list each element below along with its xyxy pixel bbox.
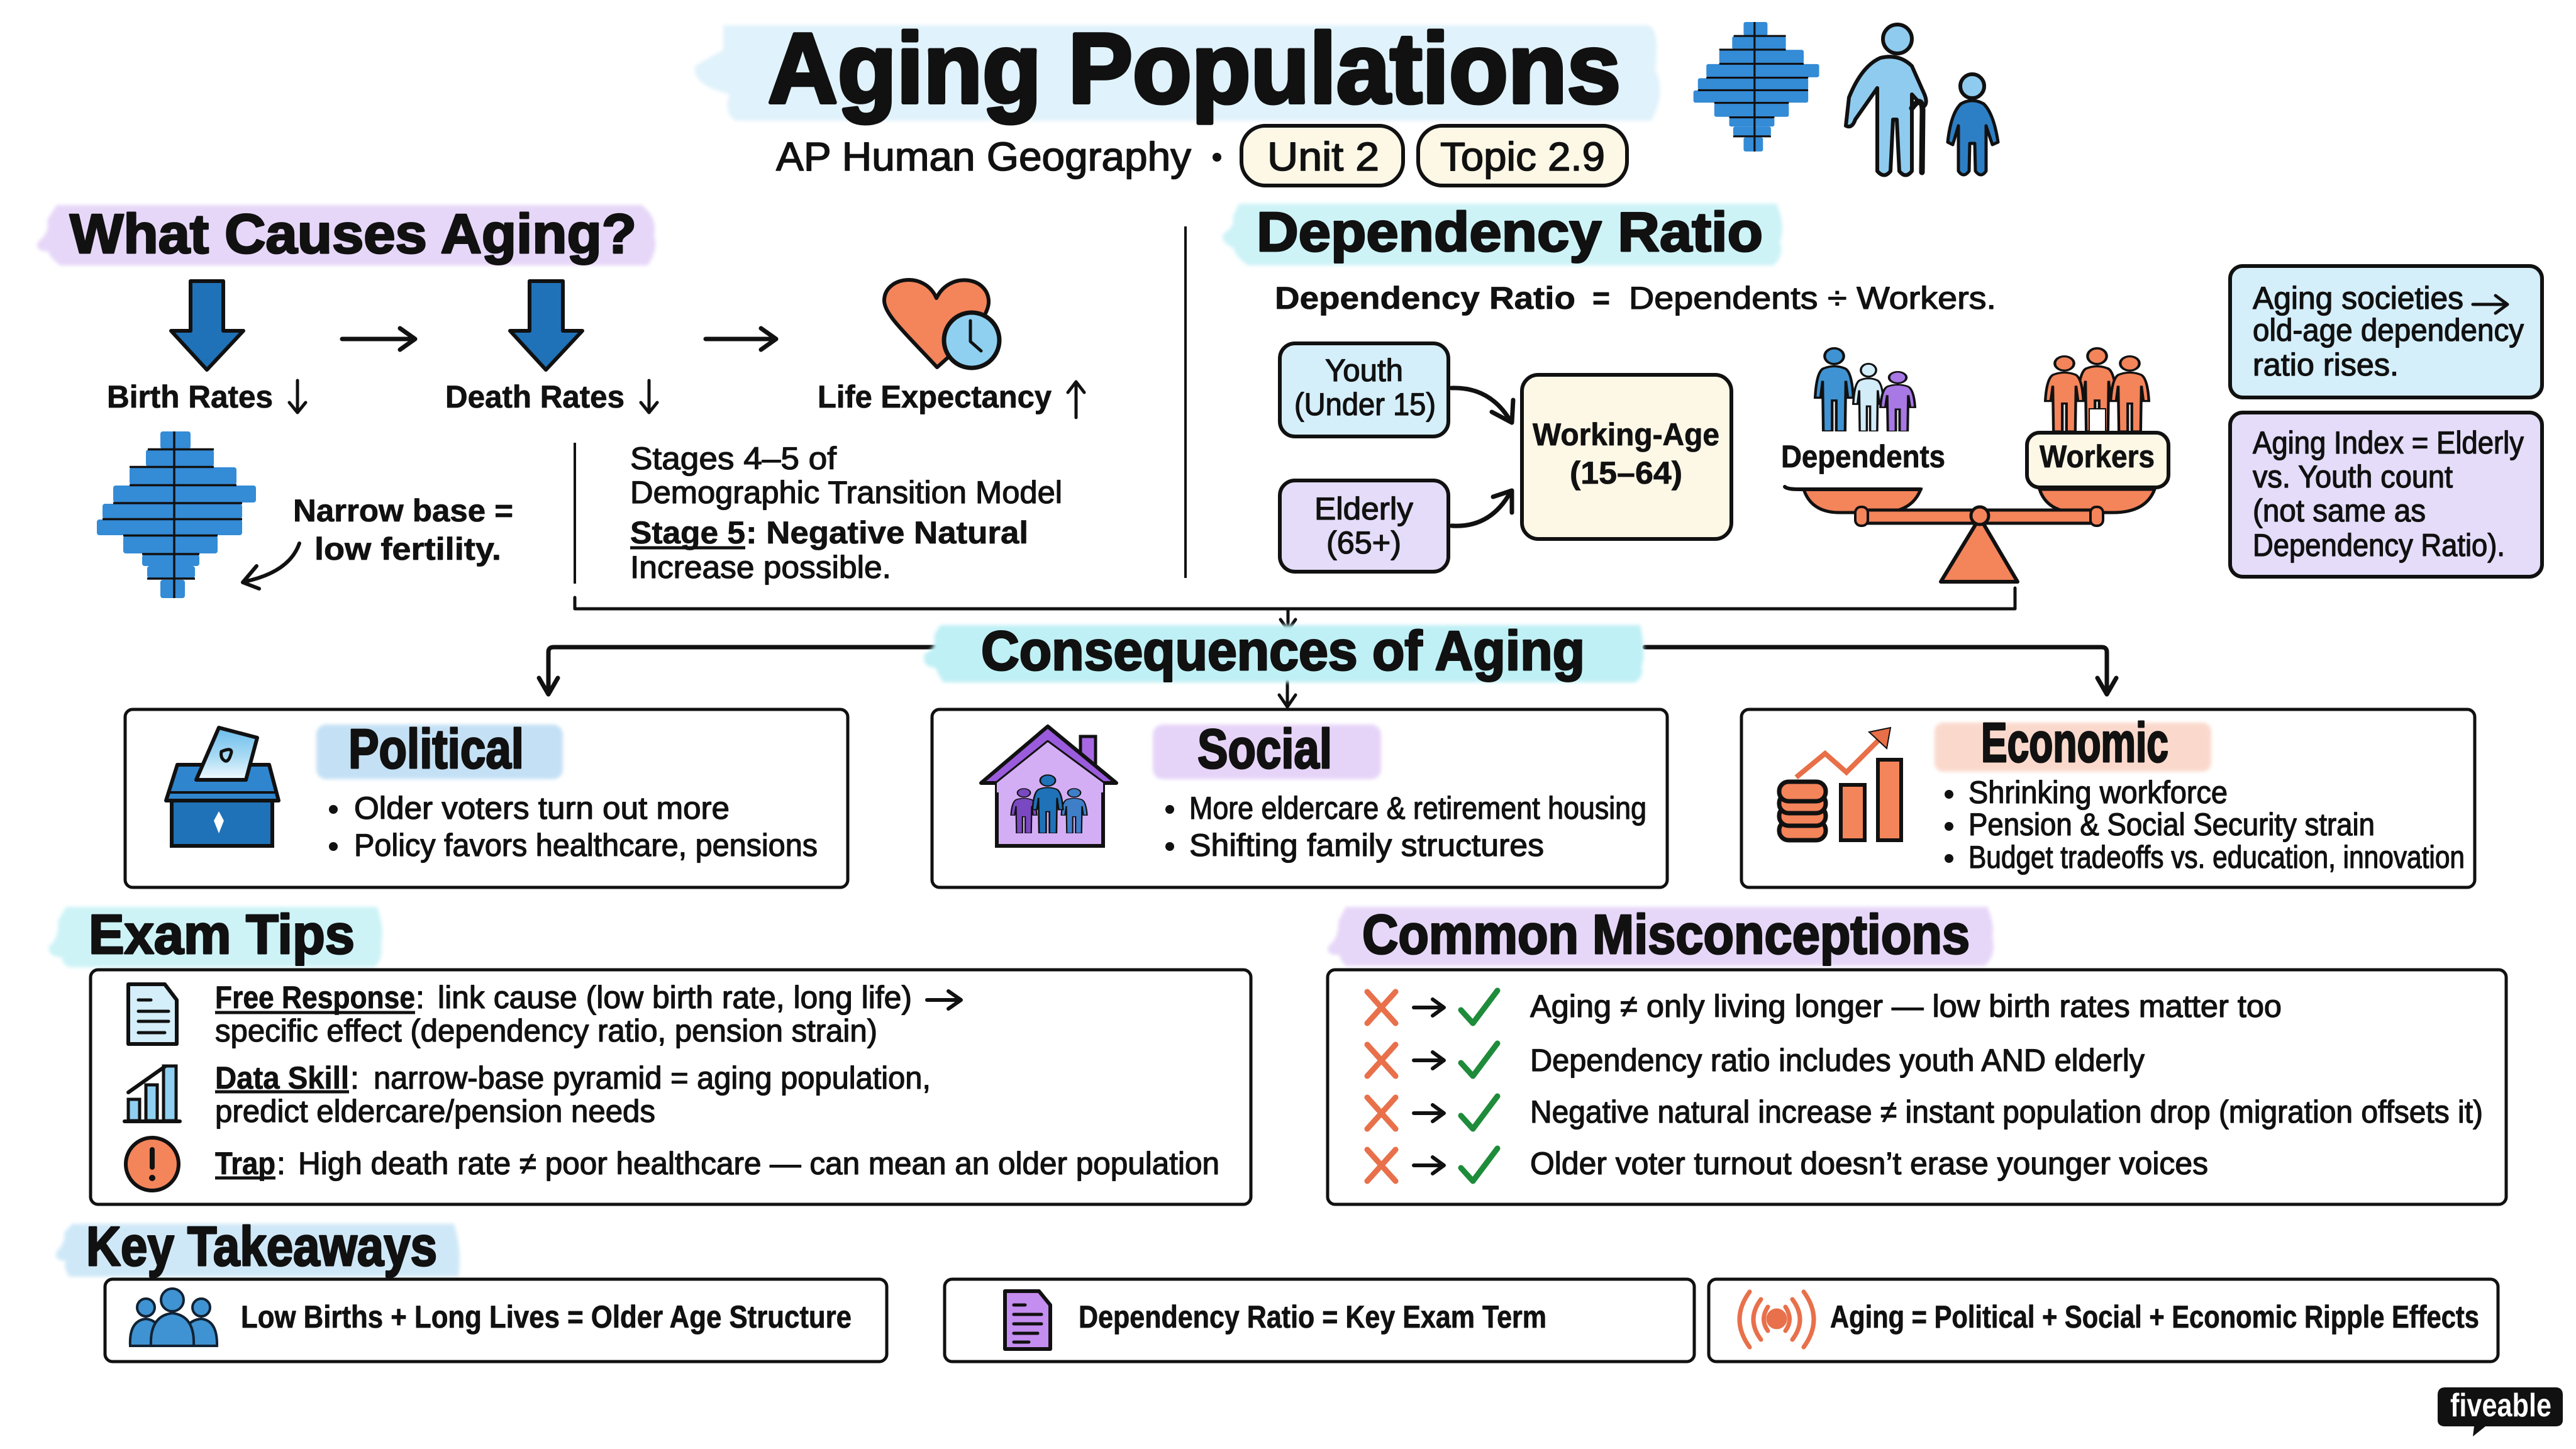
icon: ripple signal [1740, 1292, 1814, 1347]
callout: aging societies: old-age dependency [2253, 313, 2524, 348]
icon: narrow-base pyramid [97, 431, 256, 598]
panel: political [125, 709, 848, 887]
text: data skill: : [350, 1060, 359, 1096]
icon: workers figures [2045, 348, 2149, 431]
row 1: Aging ≠ only living longer — low birth rates matter too [1530, 989, 2282, 1024]
text: demographic transition model: Increase possible. [630, 550, 891, 585]
formula: Dependency Ratio [1275, 280, 1575, 316]
icon: document [128, 984, 177, 1044]
icon: heart with clock [884, 280, 999, 368]
heading highlight [49, 907, 382, 967]
heading highlight [1223, 204, 1782, 265]
box [1328, 970, 2506, 1204]
text: demographic transition model: Stages 4–5 of [630, 441, 836, 476]
arrow: consequences to economic [1645, 647, 2116, 694]
text: demographic transition model [630, 441, 1062, 585]
arrow: consequences to political [539, 647, 936, 694]
logo: fiveable: fiveable [2450, 1387, 2551, 1424]
row 4: Older voter turnout doesn’t erase younger voices [1530, 1146, 2208, 1181]
icon: coins and rising chart [1779, 728, 1901, 840]
label: birth rates: Birth Rates [107, 379, 273, 414]
label: death rates: Death Rates [445, 379, 625, 414]
box: youth: (Under 15) [1294, 387, 1436, 422]
card 2: Dependency Ratio = Key Exam Term [1079, 1299, 1546, 1335]
row 2: Dependency ratio includes youth AND elderly [1530, 1043, 2145, 1078]
bracket connector [575, 588, 2015, 630]
bullets [1945, 775, 2465, 875]
separator dot [1213, 153, 1221, 162]
bullets: Policy favors healthcare, pensions [354, 828, 818, 863]
box: elderly [1280, 480, 1448, 572]
text: demographic transition model: Demographic Transition Model [630, 475, 1062, 510]
callout: aging index: vs. Youth count [2253, 459, 2453, 494]
callout: aging index: (not same as [2253, 493, 2426, 528]
callout: aging index [2230, 413, 2542, 577]
bullets: Budget tradeoffs vs. education, innovation [1968, 840, 2465, 875]
arrow: curved to pyramid base [243, 543, 299, 589]
box: elderly: Elderly [1314, 491, 1413, 526]
panel: common misconceptions [1328, 903, 2506, 1204]
heading highlight [56, 1224, 460, 1277]
icon: ballot box [166, 728, 279, 846]
bullets: Pension & Social Security strain [1968, 807, 2375, 842]
icon: warning [126, 1138, 179, 1191]
heading: Dependency Ratio [1257, 201, 1763, 263]
icon: dependents figures [1815, 348, 1915, 431]
icon: birth arrow [171, 281, 243, 370]
label: life expectancy: Life Expectancy [818, 379, 1052, 414]
panel: social [932, 709, 1667, 887]
bullets: More eldercare & retirement housing [1189, 791, 1646, 826]
heading highlight [37, 205, 655, 265]
text: trap: : [277, 1146, 286, 1181]
icon: balance scale [1785, 487, 2155, 582]
icon: death arrow [510, 281, 582, 370]
heading highlight [316, 724, 563, 779]
icon: elderly person with cane [1846, 25, 1926, 175]
callout: aging societies: ratio rises. [2253, 347, 2399, 382]
card 1 [105, 1279, 887, 1362]
callout: aging index: Dependency Ratio). [2253, 528, 2505, 563]
callout: aging societies [2230, 266, 2542, 397]
box: working-age: Working-Age [1533, 417, 1719, 452]
panel: exam tips [49, 903, 1251, 1204]
bullets: Shifting family structures [1189, 828, 1544, 863]
heading: Key Takeaways [86, 1215, 437, 1277]
text: free response: specific effect (dependency ratio, pension strain) [215, 1013, 877, 1048]
note: narrow base [293, 493, 513, 567]
pill: unit: Unit 2 [1267, 134, 1379, 179]
icon: people group [130, 1289, 217, 1346]
text: free response: link cause (low birth rate, long life) [438, 980, 912, 1015]
label: workers [2027, 433, 2168, 487]
arrow: consequences to social [1279, 681, 1296, 707]
vertical rule [574, 443, 576, 584]
icon: child [1948, 74, 1998, 175]
heading highlight [1153, 724, 1381, 779]
text: trap: Trap [215, 1146, 275, 1181]
bullets [1165, 791, 1646, 863]
card 3 [1709, 1279, 2498, 1362]
note: narrow base: Narrow base = [293, 493, 513, 528]
heading: Social [1197, 718, 1332, 780]
card 2 [945, 1279, 1694, 1362]
box [91, 970, 1251, 1204]
pill: unit [1241, 126, 1403, 186]
arrow: youth to working-age [1452, 388, 1513, 423]
text: free response [215, 980, 961, 1048]
heading highlight [1935, 723, 2211, 772]
label: workers: Workers [2040, 439, 2155, 474]
text: demographic transition model: : Negative Natural [746, 515, 1028, 550]
box: youth [1280, 343, 1448, 436]
formula [1275, 280, 1996, 316]
card 1: Low Births + Long Lives = Older Age Structure [241, 1299, 852, 1335]
bullets: Older voters turn out more [354, 791, 730, 826]
row 3: Negative natural increase ≠ instant population drop (migration offsets it) [1530, 1094, 2483, 1130]
heading highlight [1328, 907, 1994, 966]
text: free response: Free Response [215, 980, 415, 1015]
arrow: elderly to working-age [1452, 491, 1512, 526]
title block [695, 13, 1660, 186]
label: dependents: Dependents [1781, 439, 1945, 474]
formula: = [1592, 280, 1610, 316]
text: data skill: narrow-base pyramid = aging population, [374, 1060, 931, 1096]
icon: purple document [1005, 1291, 1050, 1349]
box: elderly: (65+) [1326, 525, 1401, 560]
panel: what causes aging [37, 203, 1084, 598]
icon: bar chart [125, 1066, 180, 1121]
text: data skill: predict eldercare/pension needs [215, 1094, 655, 1129]
bullets [329, 791, 818, 863]
formula: Dependents ÷ Workers. [1629, 280, 1996, 316]
vertical divider [1184, 226, 1187, 578]
callout: aging societies: Aging societies [2253, 280, 2463, 316]
arrow [706, 328, 776, 350]
arrow [342, 328, 415, 350]
heading: Common Misconceptions [1362, 903, 1970, 965]
logo: fiveable [2438, 1387, 2563, 1436]
panel: dependency ratio [1223, 201, 2542, 582]
heading: Economic [1981, 711, 2168, 774]
text: demographic transition model: Stage 5 [630, 515, 745, 550]
panel: economic [1741, 709, 2475, 887]
panel: key takeaways [56, 1215, 2498, 1362]
title highlight [695, 25, 1660, 121]
subtitle: AP Human Geography [776, 134, 1191, 179]
heading: consequences of aging: Consequences of Aging [981, 619, 1585, 682]
heading: Exam Tips [89, 903, 355, 965]
text: trap: High death rate ≠ poor healthcare — can mean an older population [298, 1146, 1219, 1181]
heading: Political [348, 718, 524, 780]
note: narrow base: low fertility. [314, 531, 501, 567]
text: free response: : [416, 980, 425, 1015]
box: youth: Youth [1325, 353, 1403, 388]
box: working-age [1522, 375, 1731, 539]
title: Aging Populations [768, 13, 1621, 124]
text: data skill: Data Skill [215, 1060, 349, 1096]
text: data skill [215, 1060, 931, 1129]
icon: house with family [981, 726, 1116, 846]
callout: aging index: Aging Index = Elderly [2253, 425, 2524, 460]
box: working-age: (15–64) [1570, 455, 1682, 491]
heading: What Causes Aging? [70, 203, 636, 265]
pill: topic [1418, 126, 1627, 186]
bullets: Shrinking workforce [1968, 775, 2228, 810]
pill: topic: Topic 2.9 [1440, 134, 1605, 179]
icon: header population pyramid [1694, 22, 1819, 152]
